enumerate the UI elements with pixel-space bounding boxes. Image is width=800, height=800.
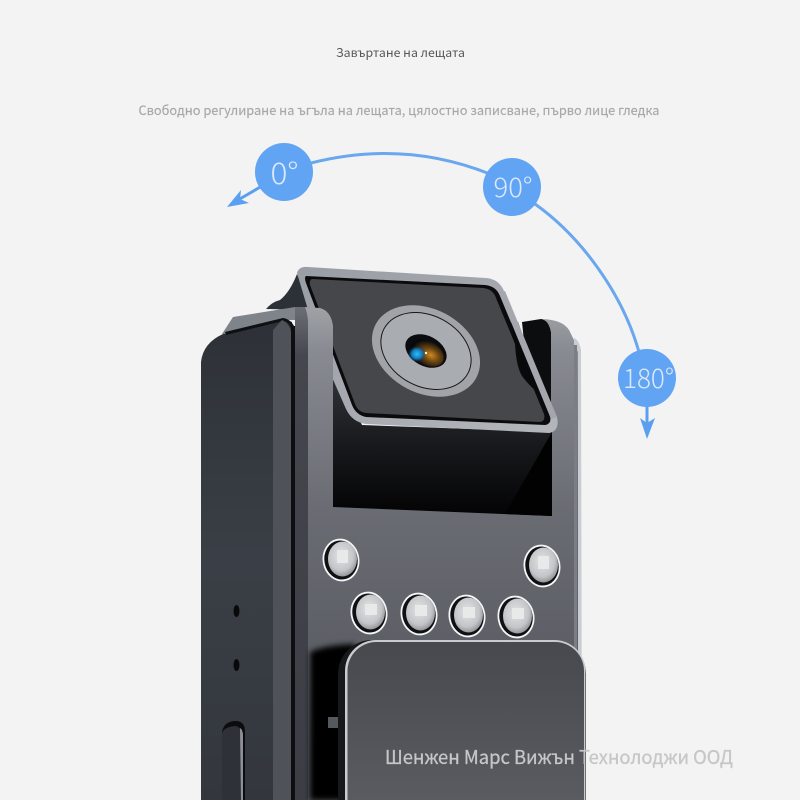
badge: 0 degrees <box>255 143 313 201</box>
cover highlight <box>345 640 586 800</box>
module frame <box>297 267 558 433</box>
camera device <box>201 267 586 800</box>
subtitle: Свободно регулиране на ъгъла на лещата, цялостно записване, първо лице гледка <box>138 100 660 119</box>
LED: row 4 <box>495 593 537 641</box>
pupil housing <box>400 327 452 375</box>
side panel black seam top <box>225 318 295 335</box>
lens plate <box>368 298 484 404</box>
side slider button <box>222 721 245 800</box>
badge: 180 degrees: 180° <box>623 357 674 396</box>
module face <box>310 279 544 422</box>
front plate <box>308 319 578 800</box>
dark seam <box>291 326 295 800</box>
right edge highlight <box>574 338 582 800</box>
title: Завъртане на лещата <box>336 44 465 61</box>
cover tab <box>328 717 338 728</box>
arc: 0 to 90 degrees <box>311 153 490 174</box>
rotation arc diagram <box>227 143 676 439</box>
clip cover <box>328 640 586 800</box>
side panel light strip <box>273 320 291 800</box>
glints <box>425 352 427 354</box>
neck window <box>333 365 552 516</box>
watermark: Шенжен Марс Вижън Технолоджи ООД <box>385 743 733 770</box>
side hole: lower <box>234 659 240 671</box>
right edge groove <box>574 345 577 800</box>
side panel top chamfer <box>222 307 304 334</box>
arrow: toward 180 degrees <box>640 405 655 439</box>
outer lens ring <box>356 287 496 415</box>
lens module <box>297 267 558 433</box>
module frame black inset <box>305 276 550 425</box>
LED: top left <box>320 536 362 584</box>
blue reflection <box>408 346 426 362</box>
cover shadow <box>310 644 355 800</box>
LED: row 1 <box>348 589 390 637</box>
cover outer edge <box>338 640 586 800</box>
LED: top right <box>521 542 563 590</box>
LED: row 2 <box>398 590 440 638</box>
neck window dark corner <box>505 432 552 516</box>
side hole: upper <box>234 605 240 617</box>
lens ring groove <box>367 297 485 405</box>
right hinge block <box>522 319 552 420</box>
arrow: toward 0 degrees <box>227 186 262 207</box>
badge: 0 degrees: 0° <box>270 149 298 193</box>
front plate side band <box>295 307 310 800</box>
badge: 90 degrees: 90° <box>494 166 532 205</box>
LED: row 3 <box>446 592 488 640</box>
rear dark hinge <box>266 274 312 310</box>
cover face <box>348 642 584 800</box>
lens assembly <box>356 287 496 415</box>
side panel <box>201 319 292 800</box>
left upright <box>305 307 333 800</box>
arc: 90 to 180 degrees <box>535 204 639 352</box>
badge: 90 degrees <box>483 158 541 216</box>
module side notch <box>511 322 552 415</box>
module frame right band <box>499 291 557 419</box>
badge: 180 degrees <box>618 349 676 407</box>
pupil glass <box>405 334 449 372</box>
